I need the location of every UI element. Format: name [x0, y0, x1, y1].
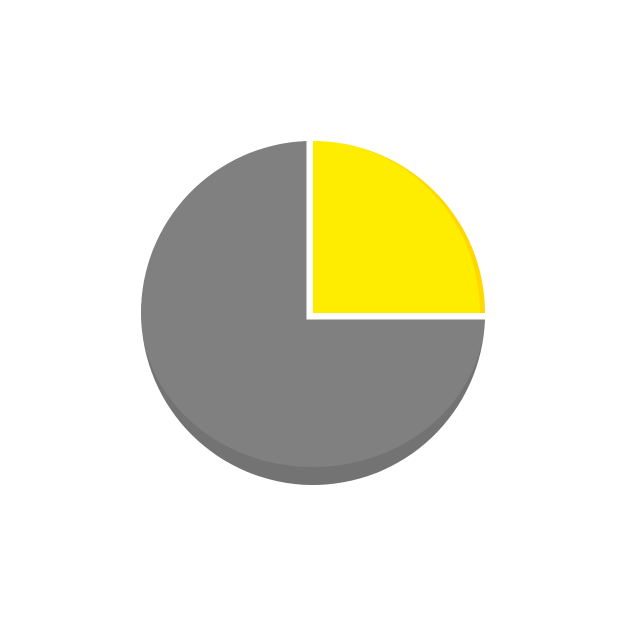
slice: gray three-quarters	[141, 141, 485, 485]
slice: yellow quarter	[313, 141, 485, 313]
